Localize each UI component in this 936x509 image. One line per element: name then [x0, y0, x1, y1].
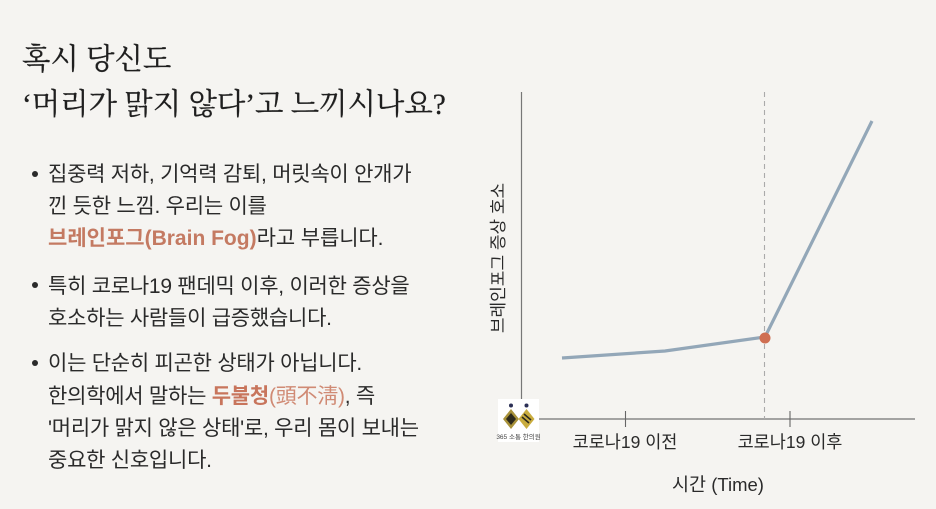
logo: 365 clinic: 365 소통 한의원	[496, 432, 541, 441]
bullet: dubulcheong explanation: 중요한 신호입니다.	[48, 449, 212, 472]
x label: after: 코로나19 이후	[738, 432, 842, 452]
x label: before: 코로나19 이전	[573, 432, 677, 452]
bullet: post-pandemic surge	[32, 275, 409, 330]
title	[22, 43, 446, 121]
x axis	[539, 418, 915, 420]
title: ‘머리가 맑지 않다’고 느끼시나요?	[22, 89, 446, 121]
dashed marker line	[764, 92, 766, 419]
bullet: dubulcheong explanation: '머리가 맑지 않은 상태'로, 우리 몸이 보내는	[48, 417, 419, 440]
bullet: brain fog definition: 브레인포그(Brain Fog)라고 부릅니다.	[48, 227, 383, 250]
x axis title: 시간 (Time)	[672, 474, 764, 495]
x axis ticks	[626, 411, 790, 427]
bullet: dubulcheong explanation: 이는 단순히 피곤한 상태가 아닙니다.	[48, 352, 362, 375]
bullet: post-pandemic surge: 특히 코로나19 팬데믹 이후, 이러한 증상을	[48, 275, 409, 298]
bullet: brain fog definition	[32, 163, 411, 250]
bullet: post-pandemic surge: 호소하는 사람들이 급증했습니다.	[48, 307, 332, 330]
bullet: dubulcheong explanation	[32, 352, 419, 472]
bullet: dubulcheong explanation: 한의학에서 말하는 두불청(頭不淸), 즉	[48, 385, 375, 408]
logo: 365 clinic	[496, 399, 541, 442]
bullet: brain fog definition: 낀 듯한 느낌. 우리는 이를	[48, 195, 267, 218]
trend line	[562, 121, 872, 358]
turning point marker	[760, 332, 770, 344]
y axis label: 브레인포그 증상 호소	[489, 183, 508, 333]
bullet: brain fog definition: 집중력 저하, 기억력 감퇴, 머릿속이 안개가	[48, 163, 411, 186]
y axis	[520, 92, 522, 400]
title: 혹시 당신도	[22, 44, 171, 76]
